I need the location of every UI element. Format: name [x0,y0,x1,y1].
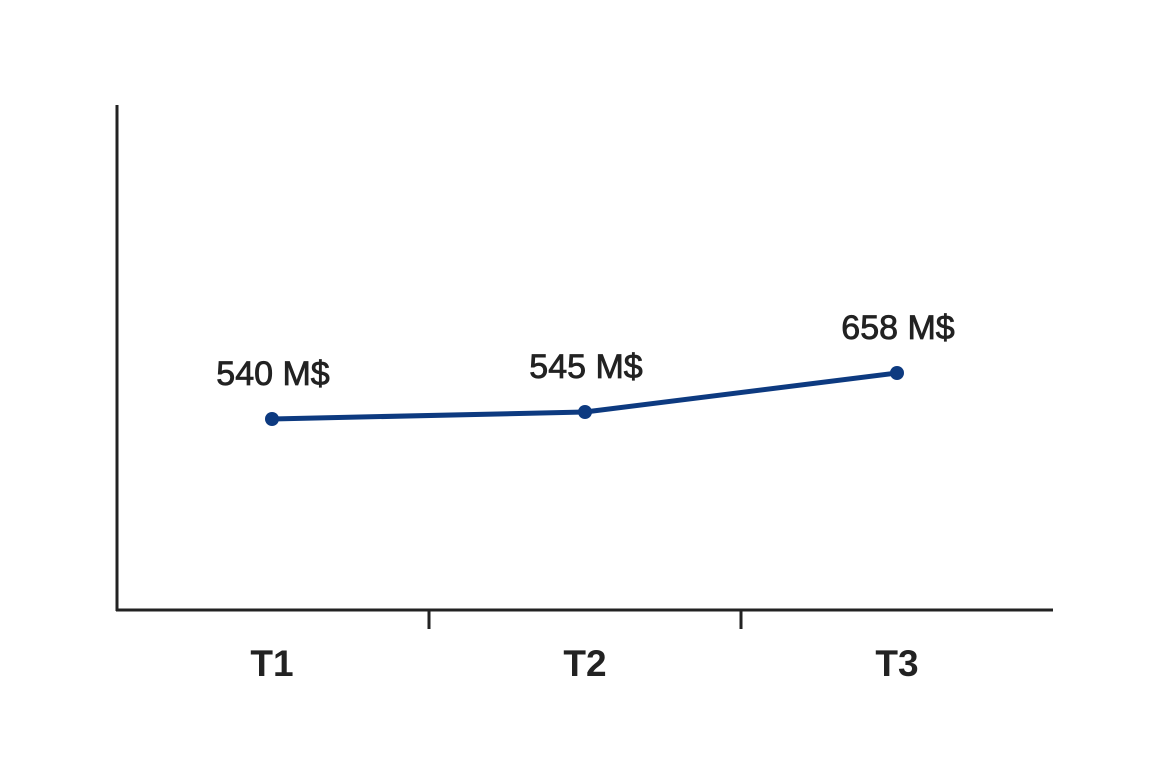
x-axis labels: T3 [875,643,919,684]
value labels [216,309,955,393]
value labels: 540 M$ [216,355,330,393]
line series [265,366,904,426]
x-axis labels: T1 [250,643,294,684]
x-axis labels [250,643,919,684]
axes [116,105,1053,629]
x-axis labels: T2 [563,643,607,684]
value labels: 658 M$ [841,309,955,347]
value labels: 545 M$ [529,348,643,386]
